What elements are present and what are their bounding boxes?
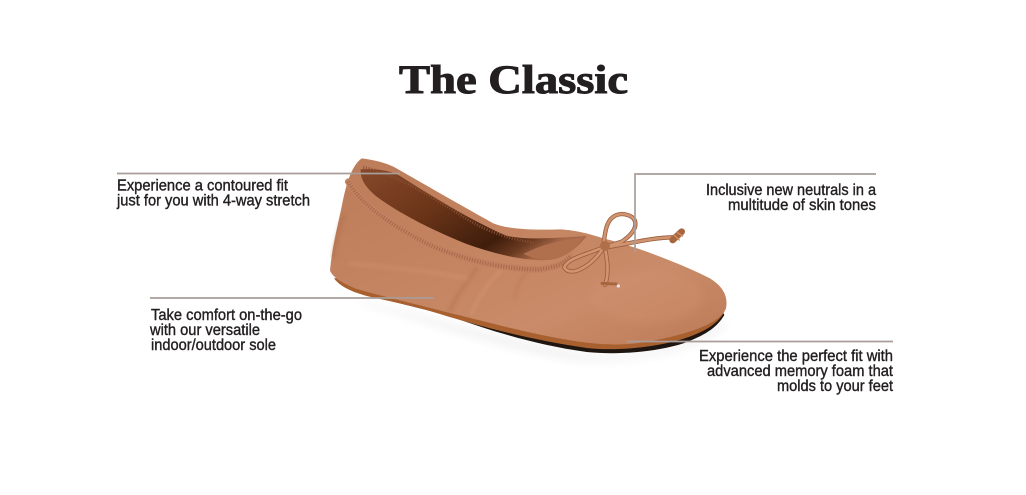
title: The Classic — [399, 57, 628, 102]
sole: tan midsole — [334, 277, 724, 349]
sole: black outsole — [353, 287, 724, 353]
upper: main body — [330, 158, 727, 344]
callout: versatile sole — [149, 298, 434, 354]
callout: memory foam — [627, 342, 894, 395]
callout: inclusive neutrals: Inclusive new neutrals in a — [706, 182, 876, 199]
callout: inclusive neutrals — [635, 174, 876, 252]
bow knots — [673, 232, 682, 240]
shoe illustration — [330, 158, 727, 361]
callout: memory foam: advanced memory foam that — [707, 363, 894, 380]
ground shadow — [360, 300, 727, 361]
callout: memory foam: Experience the perfect fit with — [699, 348, 893, 365]
callout: contoured fit — [116, 174, 400, 210]
bow — [564, 214, 683, 288]
toe highlight — [590, 270, 703, 323]
collar stitched band — [348, 182, 570, 269]
callout: versatile sole: with our versatile — [149, 322, 260, 339]
callout: contoured fit: Experience a contoured fit — [117, 178, 289, 194]
callout: versatile sole: Take comfort on-the-go — [151, 307, 302, 324]
interior lining highlight near the toe — [523, 237, 583, 260]
callout: versatile sole: indoor/outdoor sole — [151, 337, 276, 354]
callout: inclusive neutrals: multitude of skin tones — [728, 197, 876, 214]
callout: memory foam: molds to your feet — [777, 378, 894, 395]
callout: contoured fit: just for you with 4-way stretch — [116, 192, 310, 210]
interior opening — [361, 169, 587, 260]
gathers and fold shading — [333, 217, 527, 313]
